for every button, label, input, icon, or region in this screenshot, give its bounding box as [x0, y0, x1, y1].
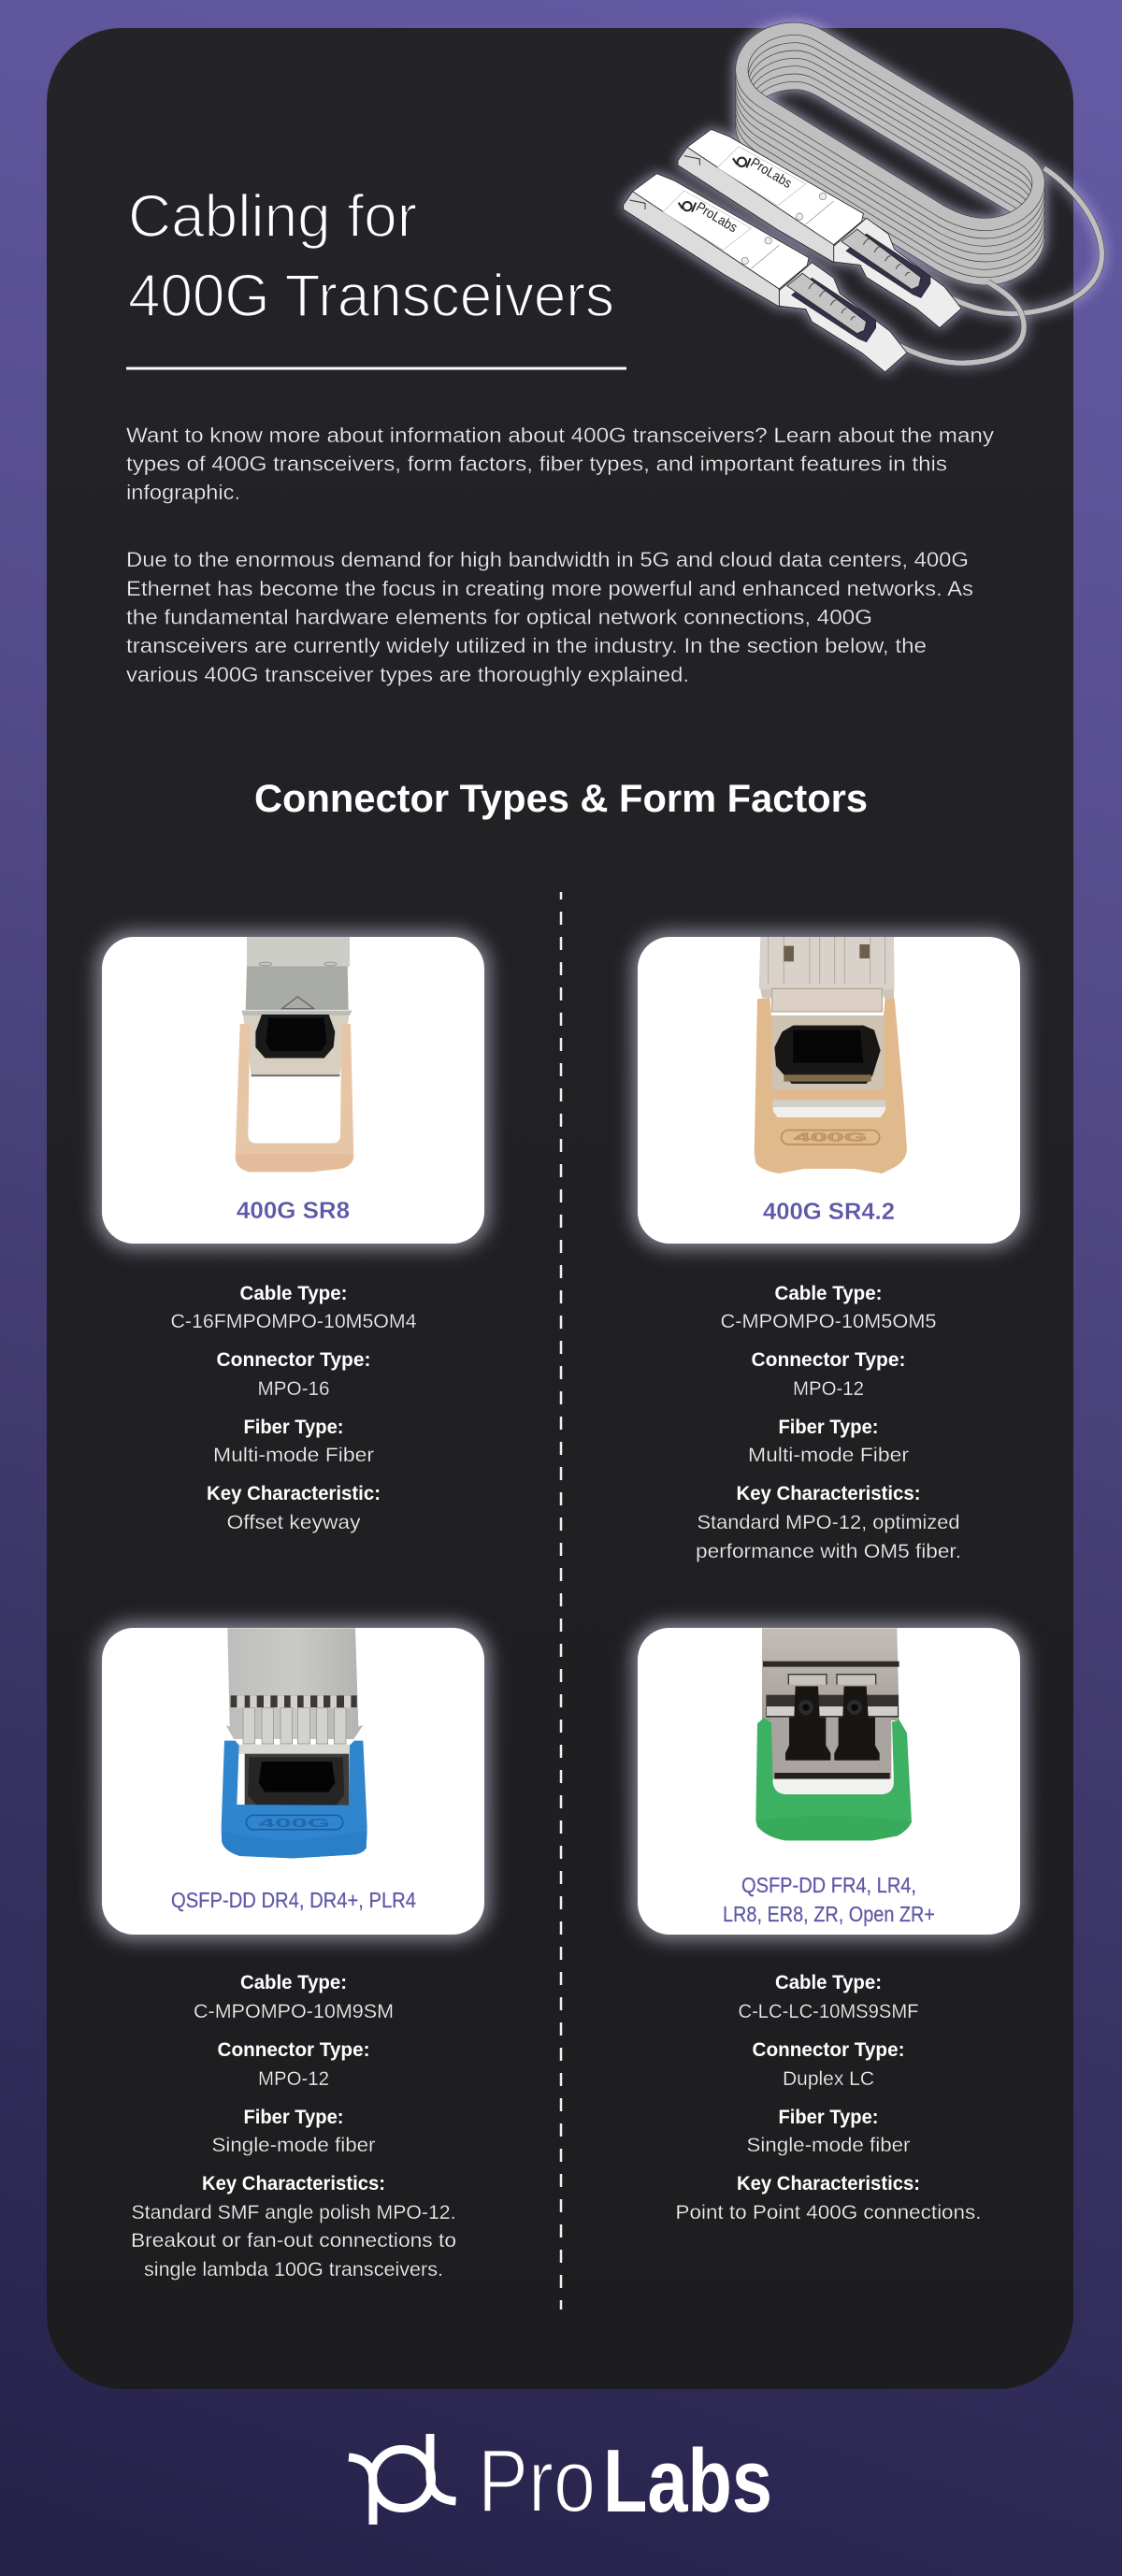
specs: QSFP-DD DR4: C-MPOMPO-10M9SM: [194, 2001, 394, 2022]
specs: QSFP-DD DR4: MPO-12: [258, 2068, 329, 2090]
specs: QSFP-DD FR4: Fiber Type:: [778, 2107, 879, 2128]
specs: 400G SR4.2: Connector Type:: [752, 1349, 905, 1371]
specs: QSFP-DD DR4: Standard SMF angle polish MPO-12.: [131, 2202, 456, 2223]
icon: DR4 transceiver: [222, 1628, 367, 1858]
specs: QSFP-DD FR4: C-LC-LC-10MS9SMF: [739, 2001, 918, 2022]
wordmark: [478, 2431, 772, 2531]
label: QSFP-DD FR4, LR4,: [741, 1873, 916, 1897]
footer logo: [349, 2431, 772, 2531]
specs: QSFP-DD FR4: Duplex LC: [783, 2068, 874, 2090]
specs: 400G SR4.2: performance with OM5 fiber.: [696, 1541, 961, 1562]
wordmark: Pro: [478, 2431, 596, 2531]
label: QSFP-DD DR4, DR4+, PLR4: [171, 1888, 416, 1912]
icon: ProLabs mark: [349, 2434, 456, 2525]
specs: QSFP-DD DR4: Fiber Type:: [243, 2107, 344, 2128]
panel: 400G SR4.2: [633, 932, 1025, 1248]
specs: QSFP-DD DR4: Key Characteristics:: [202, 2173, 385, 2195]
specs: 400G SR8: Fiber Type:: [243, 1417, 344, 1438]
specs: 400G SR8: Cable Type:: [239, 1283, 348, 1304]
specs: 400G SR8: Connector Type:: [217, 1349, 370, 1371]
coiled cable: [741, 29, 1039, 279]
label: [723, 1873, 935, 1926]
specs: QSFP-DD DR4: Single-mode fiber: [211, 2135, 376, 2156]
specs: 400G SR8: MPO-16: [258, 1378, 329, 1400]
card glow and background: [97, 1623, 489, 1939]
specs: 400G SR4.2: [696, 1283, 961, 1562]
specs: 400G SR4.2: Key Characteristics:: [737, 1483, 920, 1504]
specs: QSFP-DD DR4: single lambda 100G transceivers.: [144, 2259, 443, 2281]
specs: QSFP-DD FR4: Key Characteristics:: [737, 2173, 920, 2195]
icon: SR4.2 transceiver: [755, 937, 907, 1173]
specs: 400G SR4.2: Multi-mode Fiber: [748, 1445, 909, 1466]
specs: 400G SR8: Key Characteristic:: [207, 1483, 381, 1504]
connector module upper: [678, 129, 961, 328]
label: 400G SR8: [237, 1198, 350, 1224]
intro paragraph 1: Want to know more about information about 400G transceivers? Learn about the many: [126, 424, 995, 447]
connector module upper: ProLabs: [748, 155, 794, 192]
specs: QSFP-DD FR4: Connector Type:: [752, 2039, 905, 2061]
specs: 400G SR4.2: Cable Type:: [774, 1283, 883, 1304]
connector module lower: ProLabs: [693, 200, 740, 236]
card glow and background: [97, 932, 489, 1248]
specs: 400G SR4.2: MPO-12: [793, 1378, 864, 1400]
intro paragraph 2: various 400G transceiver types are thoroughly explained.: [126, 663, 689, 686]
icon: SR8 transceiver: [236, 937, 353, 1172]
label: LR8, ER8, ZR, Open ZR+: [723, 1902, 935, 1926]
thin cable loops: [867, 168, 1101, 363]
panel: QSFP-DD FR4: [633, 1623, 1025, 1939]
label: 400G SR4.2: [763, 1199, 895, 1225]
specs: 400G SR8: C-16FMPOMPO-10M5OM4: [170, 1311, 417, 1332]
specs: 400G SR4.2: Fiber Type:: [778, 1417, 879, 1438]
specs: 400G SR4.2: Standard MPO-12, optimized: [698, 1512, 959, 1533]
intro paragraph 2: transceivers are currently widely utilized in the industry. In the section below, the: [126, 634, 927, 657]
title: [128, 182, 614, 329]
specs: 400G SR8: [170, 1283, 417, 1533]
wordmark: Labs: [603, 2431, 772, 2531]
illustration: coiled cable with two connectors: [624, 29, 1101, 372]
title underline: [126, 367, 626, 370]
specs: QSFP-DD DR4: Breakout or fan-out connections to: [131, 2230, 456, 2252]
icon: DR4 transceiver: 400G: [259, 1817, 331, 1830]
specs: QSFP-DD FR4: [675, 1972, 982, 2223]
specs: QSFP-DD FR4: Point to Point 400G connections.: [675, 2202, 982, 2223]
intro paragraph 2: the fundamental hardware elements for optical network connections, 400G: [126, 606, 872, 628]
connector module lower: [624, 174, 907, 372]
card glow and background: [633, 1623, 1025, 1939]
icon: SR4.2 transceiver: 400G: [794, 1130, 867, 1144]
title: 400G Transceivers: [128, 262, 614, 329]
specs: QSFP-DD DR4: Connector Type:: [217, 2039, 370, 2061]
title: Cabling for: [128, 182, 417, 250]
intro paragraph 1: [126, 424, 995, 504]
specs: QSFP-DD FR4: Single-mode fiber: [746, 2135, 911, 2156]
panel: 400G SR8: [97, 932, 489, 1248]
specs: QSFP-DD FR4: Cable Type:: [775, 1972, 882, 1993]
section heading: Connector Types & Form Factors: [254, 776, 868, 820]
intro paragraph 1: types of 400G transceivers, form factors, fiber types, and important features in this: [126, 453, 947, 475]
specs: 400G SR8: Offset keyway: [226, 1512, 361, 1533]
specs: 400G SR4.2: C-MPOMPO-10M5OM5: [720, 1311, 937, 1332]
specs: 400G SR8: Multi-mode Fiber: [213, 1445, 374, 1466]
specs: QSFP-DD DR4: [131, 1972, 456, 2281]
intro paragraph 2: [126, 548, 973, 686]
dashed divider: [560, 892, 562, 2310]
icon: FR4 transceiver: [755, 1628, 912, 1840]
card glow and background: [633, 932, 1025, 1248]
intro paragraph 2: Ethernet has become the focus in creating more powerful and enhanced networks. As: [126, 577, 973, 600]
specs: QSFP-DD DR4: Cable Type:: [240, 1972, 347, 1993]
panel: QSFP-DD DR4: [97, 1623, 489, 1939]
intro paragraph 1: infographic.: [126, 481, 240, 504]
intro paragraph 2: Due to the enormous demand for high bandwidth in 5G and cloud data centers, 400G: [126, 548, 969, 571]
